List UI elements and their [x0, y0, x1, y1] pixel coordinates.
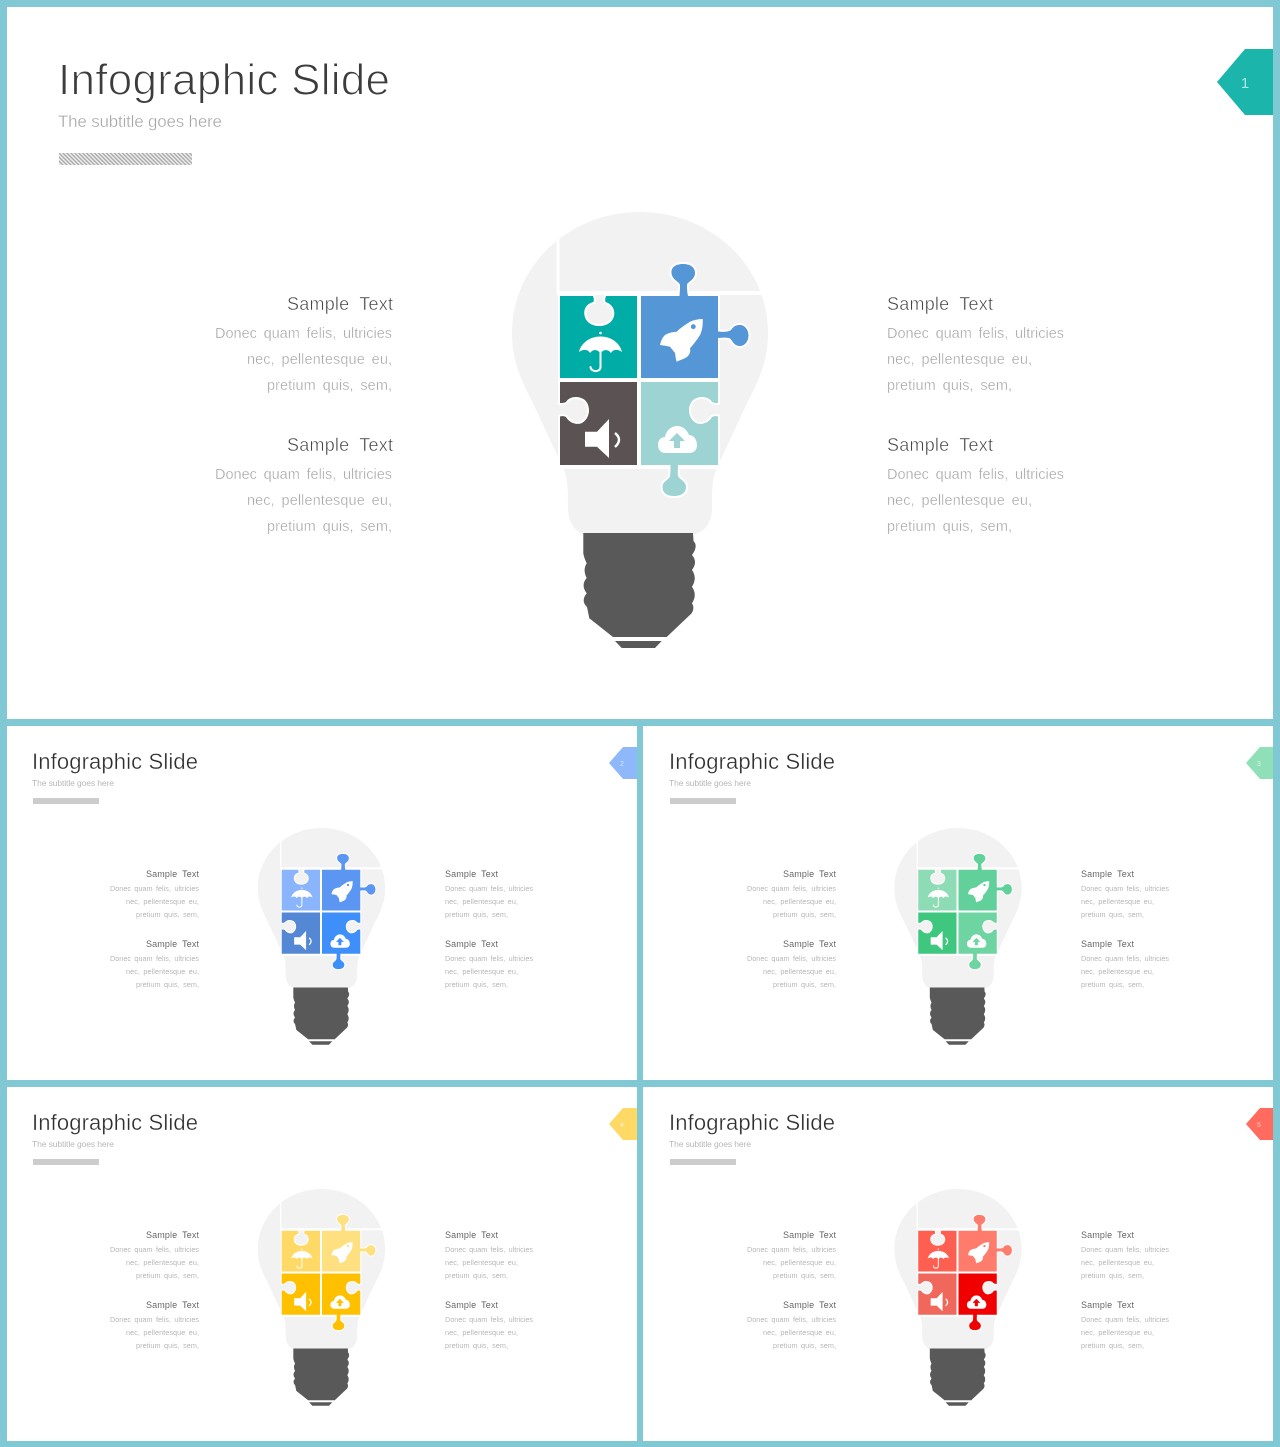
text block: left bottom: pretium quis, sem,	[267, 519, 392, 535]
text block: left: Donec quam felis, ultricies	[110, 954, 199, 963]
page number tab	[1246, 1108, 1273, 1140]
text block: left	[110, 869, 199, 989]
text block: right: nec, pellentesque eu,	[1081, 897, 1154, 906]
text block: right: nec, pellentesque eu,	[1081, 967, 1154, 976]
text block: right bottom	[887, 435, 1064, 535]
puzzle piece: speaker	[560, 382, 637, 465]
page number tab: 2	[620, 761, 624, 768]
text block: left bottom: Donec quam felis, ultricies	[215, 467, 392, 483]
text block: left: pretium quis, sem,	[773, 1341, 836, 1350]
text block: left	[110, 1230, 199, 1350]
text block: right: nec, pellentesque eu,	[1081, 1258, 1154, 1267]
text block: right top	[887, 294, 1064, 394]
text block: right top: nec, pellentesque eu,	[887, 352, 1032, 368]
puzzle piece: umbrella	[282, 1231, 320, 1272]
text block: left: nec, pellentesque eu,	[126, 897, 199, 906]
text block: left: Donec quam felis, ultricies	[747, 884, 836, 893]
text block: left: Sample Text	[783, 869, 836, 879]
puzzle piece: rocket	[322, 1215, 375, 1272]
text block: left: Donec quam felis, ultricies	[110, 1315, 199, 1324]
text block: right	[1081, 869, 1169, 989]
text block: left: nec, pellentesque eu,	[126, 1258, 199, 1267]
text block: left bottom: nec, pellentesque eu,	[247, 493, 392, 509]
text block: right top: pretium quis, sem,	[887, 378, 1012, 394]
page number tab	[1246, 747, 1273, 779]
subtitle: The subtitle goes here	[669, 1139, 751, 1149]
light bulb puzzle illustration	[258, 828, 385, 1045]
text block: left: nec, pellentesque eu,	[763, 967, 836, 976]
text block: right: pretium quis, sem,	[445, 910, 508, 919]
text block: left: nec, pellentesque eu,	[126, 967, 199, 976]
text block: left: pretium quis, sem,	[773, 1271, 836, 1280]
text block: right: Donec quam felis, ultricies	[445, 954, 533, 963]
text block: left: Donec quam felis, ultricies	[747, 1315, 836, 1324]
panel: red variant	[643, 1087, 1273, 1441]
puzzle piece: rocket	[641, 264, 748, 378]
hatched title bar	[59, 153, 192, 165]
puzzle piece: umbrella	[918, 870, 957, 911]
text block: right bottom: nec, pellentesque eu,	[887, 493, 1032, 509]
text block: right bottom: Donec quam felis, ultricies	[887, 467, 1064, 483]
title: Infographic Slide	[32, 1110, 198, 1135]
page number tab	[609, 747, 637, 779]
text block: left: nec, pellentesque eu,	[126, 1328, 199, 1337]
puzzle piece: umbrella	[282, 870, 320, 911]
text block: right: Sample Text	[445, 1230, 498, 1240]
text block: right: Sample Text	[1081, 939, 1134, 949]
bulb screw base	[293, 1349, 349, 1406]
bulb glass	[512, 212, 768, 534]
title bar	[670, 798, 736, 804]
subtitle: The subtitle goes here	[669, 778, 751, 788]
text block: right: Donec quam felis, ultricies	[1081, 1315, 1169, 1324]
text block: right top: Sample Text	[887, 294, 993, 314]
bulb glass	[258, 828, 385, 988]
text block: left: pretium quis, sem,	[136, 1271, 199, 1280]
title: Infographic Slide	[32, 749, 198, 774]
light bulb puzzle illustration	[512, 212, 768, 648]
bulb screw base	[583, 533, 696, 648]
text block: left	[747, 1230, 836, 1350]
text block: left	[747, 869, 836, 989]
text block: left: Donec quam felis, ultricies	[747, 954, 836, 963]
text block: right: pretium quis, sem,	[1081, 1341, 1144, 1350]
light bulb puzzle illustration	[258, 1189, 385, 1406]
puzzle piece: cloud upload	[958, 912, 997, 969]
puzzle piece: cloud upload	[322, 1273, 360, 1330]
text block: right: Donec quam felis, ultricies	[1081, 1245, 1169, 1254]
puzzle piece: rocket	[958, 854, 1012, 911]
subtitle: The subtitle goes here	[32, 1139, 114, 1149]
text block: right: pretium quis, sem,	[445, 1271, 508, 1280]
puzzle piece: cloud upload	[641, 382, 718, 496]
text block: right: pretium quis, sem,	[1081, 980, 1144, 989]
text block: left: Sample Text	[783, 1230, 836, 1240]
text block: right: Sample Text	[1081, 869, 1134, 879]
text block: left: pretium quis, sem,	[136, 980, 199, 989]
text block: left: Sample Text	[146, 1300, 199, 1310]
text block: left top: Sample Text	[287, 294, 393, 314]
text block: right: Donec quam felis, ultricies	[1081, 954, 1169, 963]
puzzle piece: cloud upload	[958, 1273, 997, 1330]
subtitle: The subtitle goes here	[58, 112, 222, 131]
text block: left: pretium quis, sem,	[136, 1341, 199, 1350]
bulb screw base	[930, 1349, 986, 1406]
text block: right bottom: pretium quis, sem,	[887, 519, 1012, 535]
puzzle piece: cloud upload	[322, 912, 360, 969]
text block: left top: pretium quis, sem,	[267, 378, 392, 394]
page number tab: 4	[620, 1122, 624, 1129]
text block: right: Sample Text	[1081, 1230, 1134, 1240]
puzzle piece: speaker	[918, 912, 957, 954]
title bar	[33, 798, 99, 804]
text block: right: Donec quam felis, ultricies	[445, 884, 533, 893]
text block: right: Donec quam felis, ultricies	[445, 1315, 533, 1324]
text block: left top: nec, pellentesque eu,	[247, 352, 392, 368]
title bar	[670, 1159, 736, 1165]
title: Infographic Slide	[669, 749, 835, 774]
text block: left bottom: Sample Text	[287, 435, 393, 455]
puzzle piece: umbrella	[918, 1231, 957, 1272]
puzzle piece: speaker	[282, 1273, 320, 1315]
text block: left: Sample Text	[783, 939, 836, 949]
page number tab	[609, 1108, 637, 1140]
text block: left top	[215, 294, 393, 394]
text block: left: nec, pellentesque eu,	[763, 1328, 836, 1337]
text block: right: pretium quis, sem,	[445, 980, 508, 989]
page number tab	[1217, 49, 1273, 115]
bulb screw base	[930, 988, 986, 1045]
text block: right: Sample Text	[445, 1300, 498, 1310]
text block: right: Donec quam felis, ultricies	[1081, 884, 1169, 893]
subtitle: The subtitle goes here	[32, 778, 114, 788]
text block: left bottom	[215, 435, 393, 535]
page number tab: 1	[1241, 75, 1249, 92]
text block: right top: Donec quam felis, ultricies	[887, 326, 1064, 342]
bulb glass	[258, 1189, 385, 1349]
text block: right	[1081, 1230, 1169, 1350]
text block: right: nec, pellentesque eu,	[445, 1328, 518, 1337]
panel: main slide	[7, 7, 1273, 719]
text block: left: Sample Text	[146, 1230, 199, 1240]
puzzle piece: speaker	[918, 1273, 957, 1315]
light bulb puzzle illustration	[894, 828, 1022, 1045]
text block: left: Donec quam felis, ultricies	[110, 884, 199, 893]
text block: right: Donec quam felis, ultricies	[445, 1245, 533, 1254]
text block: left: pretium quis, sem,	[773, 980, 836, 989]
text block: left: nec, pellentesque eu,	[763, 897, 836, 906]
panel: blue variant	[7, 726, 637, 1080]
bulb glass	[894, 1189, 1022, 1349]
puzzle piece: rocket	[958, 1215, 1012, 1272]
page number tab: 3	[1257, 761, 1261, 768]
text block: right: nec, pellentesque eu,	[1081, 1328, 1154, 1337]
puzzle piece: umbrella	[560, 296, 637, 378]
puzzle piece: rocket	[322, 854, 375, 911]
text block: left top: Donec quam felis, ultricies	[215, 326, 392, 342]
text block: left: Sample Text	[783, 1300, 836, 1310]
text block: right: nec, pellentesque eu,	[445, 897, 518, 906]
text block: right: Sample Text	[1081, 1300, 1134, 1310]
page number tab: 5	[1257, 1122, 1261, 1129]
text block: right: nec, pellentesque eu,	[445, 967, 518, 976]
text block: right bottom: Sample Text	[887, 435, 993, 455]
text block: right: pretium quis, sem,	[1081, 910, 1144, 919]
bulb screw base	[293, 988, 349, 1045]
light bulb puzzle illustration	[894, 1189, 1022, 1406]
text block: left: Donec quam felis, ultricies	[110, 1245, 199, 1254]
text block: left: pretium quis, sem,	[773, 910, 836, 919]
text block: right: pretium quis, sem,	[445, 1341, 508, 1350]
panel: yellow variant	[7, 1087, 637, 1441]
title: Infographic Slide	[669, 1110, 835, 1135]
text block: right	[445, 869, 533, 989]
text block: right: Sample Text	[445, 939, 498, 949]
text block: left: Donec quam felis, ultricies	[747, 1245, 836, 1254]
text block: right: nec, pellentesque eu,	[445, 1258, 518, 1267]
title: Infographic Slide	[58, 56, 390, 104]
text block: right: Sample Text	[445, 869, 498, 879]
panel: green variant	[643, 726, 1273, 1080]
puzzle piece: speaker	[282, 912, 320, 954]
text block: left: Sample Text	[146, 939, 199, 949]
text block: left: Sample Text	[146, 869, 199, 879]
text block: right: pretium quis, sem,	[1081, 1271, 1144, 1280]
text block: left: pretium quis, sem,	[136, 910, 199, 919]
text block: left: nec, pellentesque eu,	[763, 1258, 836, 1267]
title bar	[33, 1159, 99, 1165]
text block: right	[445, 1230, 533, 1350]
bulb glass	[894, 828, 1022, 988]
